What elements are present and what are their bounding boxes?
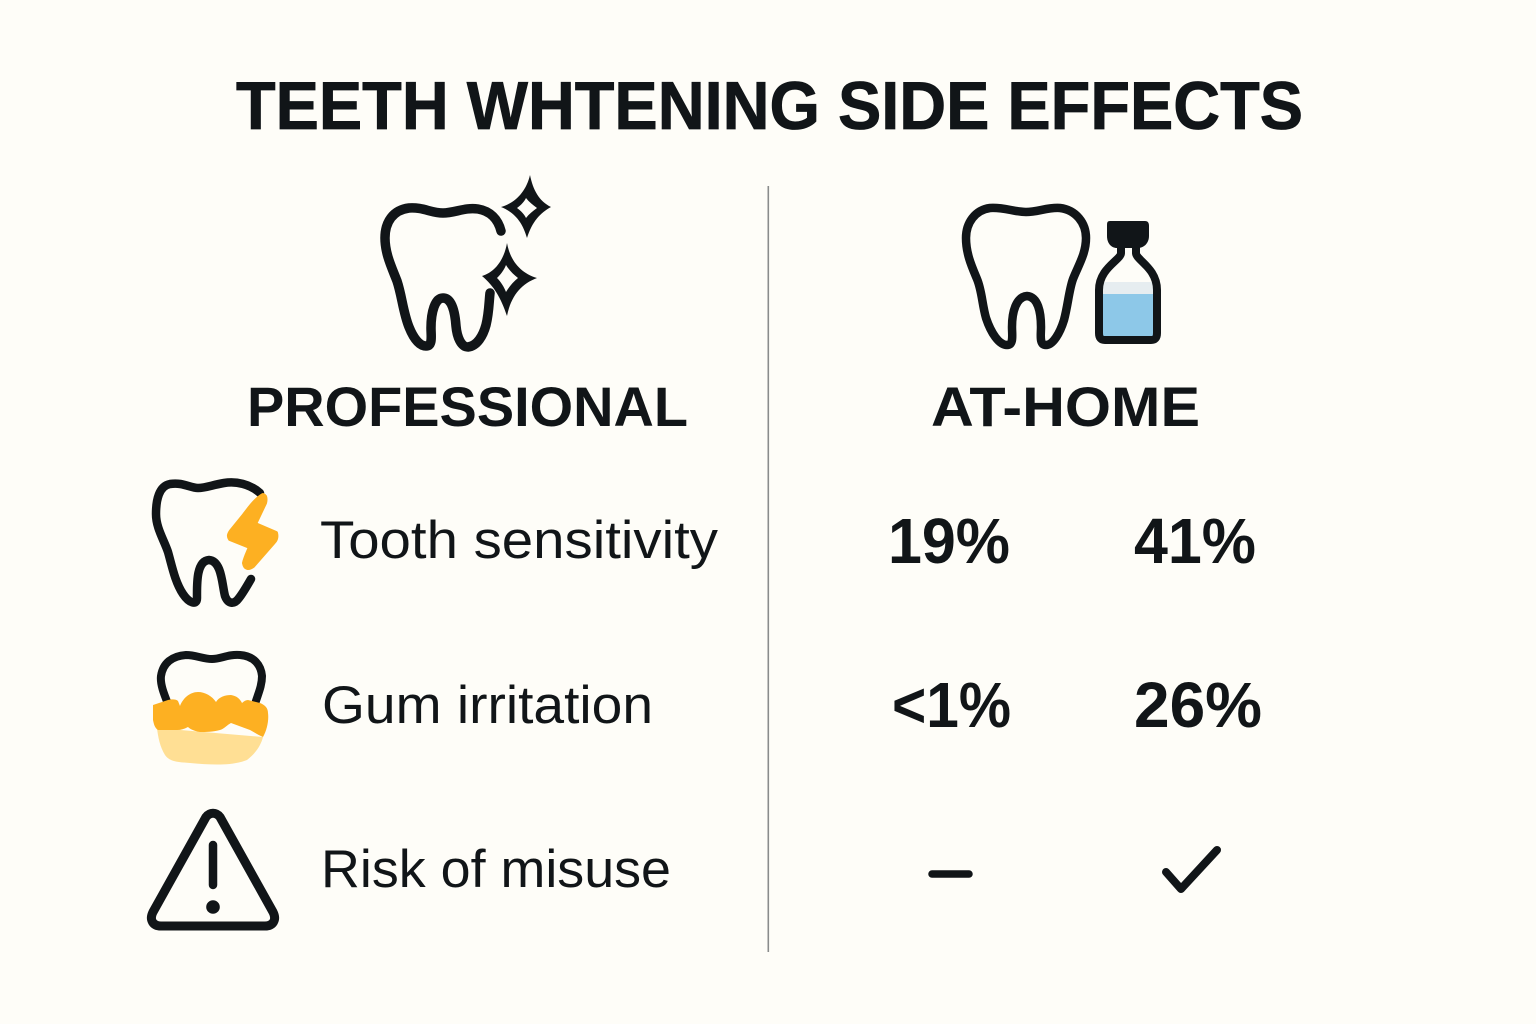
label: tooth sensitivity: Tooth sensitivity [320,511,719,570]
icon: sparkling tooth [385,175,551,347]
value: professional sensitivity: 19% [888,505,1010,577]
label: risk of misuse: Risk of misuse [321,840,671,899]
icon: check mark [1166,850,1217,889]
heading: at-home: AT-HOME [931,375,1200,438]
icon: tooth with bottle [966,208,1157,345]
icon: warning triangle [151,813,275,926]
title: TEETH WHTENING SIDE EFFECTS [236,68,1303,144]
value: at-home gum: 26% [1134,669,1262,741]
icon: dash [932,870,969,878]
label: gum irritation: Gum irritation [322,676,653,735]
column divider [768,186,769,952]
heading: professional: PROFESSIONAL [247,375,688,438]
value: at-home sensitivity: 41% [1134,505,1256,577]
icon: tooth with lightning bolt [156,482,276,603]
value: professional gum: <1% [892,669,1011,741]
icon: gum irritation [153,655,268,765]
bottle [1099,221,1157,340]
